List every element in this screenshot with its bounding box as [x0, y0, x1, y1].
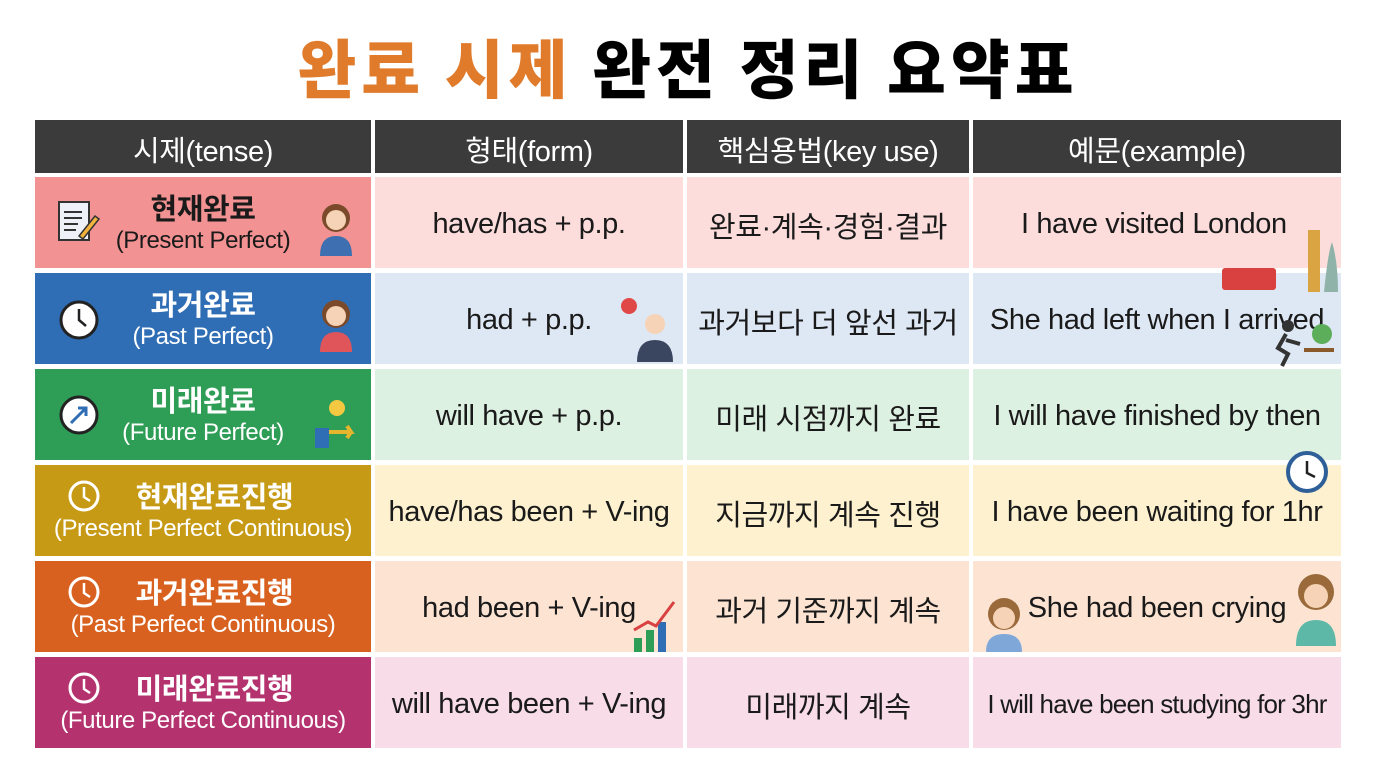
icon: crying woman — [1296, 574, 1336, 646]
icon: person row2 — [320, 300, 352, 352]
row2 form: had + p.p. — [466, 304, 592, 336]
row1 tense: (Present Perfect) — [116, 227, 290, 254]
row3 tense: (Future Perfect) — [122, 419, 284, 446]
icon: document — [58, 201, 100, 241]
row1 example: I have visited London — [1021, 208, 1287, 240]
title: 완료 시제 완전 정리 요약표 — [297, 20, 1079, 112]
row5 tense — [35, 561, 371, 652]
icon: clocks — [60, 300, 98, 340]
row5 example: She had been crying — [1028, 592, 1286, 624]
row2 use — [687, 273, 969, 364]
row5 tense: (Past Perfect Continuous) — [71, 611, 335, 638]
row4 form — [375, 465, 683, 556]
row4 tense: (Present Perfect Continuous) — [54, 515, 352, 542]
row3 use — [687, 369, 969, 460]
row1 use: 완료·계속·경험·결과 — [709, 212, 947, 244]
row1 form — [375, 177, 683, 268]
row4 example: I have been waiting for 1hr — [992, 496, 1322, 528]
row3 form: will have + p.p. — [436, 400, 622, 432]
header: example: 예문(example) — [1068, 136, 1246, 168]
row6 tense: (Future Perfect Continuous) — [60, 707, 346, 734]
row2 example: She had left when I arrived — [990, 304, 1324, 336]
row2 example — [973, 273, 1341, 364]
row5 form — [375, 561, 683, 652]
header: key use: 핵심용법(key use) — [718, 136, 938, 168]
icon: pointer hand — [315, 400, 355, 448]
icon: clock row4 — [1286, 451, 1328, 493]
row1 tense: 현재완료 — [150, 194, 256, 226]
row1 form: have/has + p.p. — [432, 208, 626, 240]
row6 form: will have been + V-ing — [392, 688, 666, 720]
row2 tense: (Past Perfect) — [132, 323, 274, 350]
icon: runner — [1275, 320, 1334, 367]
row3 example: I will have finished by then — [993, 400, 1321, 432]
row4 tense: 현재완료진행 — [136, 482, 293, 514]
row6 example — [973, 657, 1341, 748]
icon: London — [1222, 230, 1338, 292]
icon: crying girl — [986, 598, 1022, 652]
row5 use: 과거 기준까지 계속 — [715, 596, 941, 628]
row6 example: I will have been studying for 3hr — [987, 689, 1327, 719]
row2 use: 과거보다 더 앞선 과거 — [698, 308, 958, 340]
row6 form — [375, 657, 683, 748]
row3 tense — [35, 369, 371, 460]
header: key use — [687, 120, 969, 173]
row6 use: 미래까지 계속 — [745, 692, 911, 724]
header: tense: 시제(tense) — [133, 136, 273, 168]
row3 example — [973, 369, 1341, 460]
header: example — [973, 120, 1341, 173]
row5 use — [687, 561, 969, 652]
row3 form — [375, 369, 683, 460]
header: form — [375, 120, 683, 173]
row4 use — [687, 465, 969, 556]
row4 example — [973, 465, 1341, 556]
row2 tense — [35, 273, 371, 364]
row4 form: have/has been + V-ing — [388, 496, 670, 528]
row2 form — [375, 273, 683, 364]
row2 tense: 과거완료 — [150, 290, 256, 322]
row4 use: 지금까지 계속 진행 — [715, 500, 941, 532]
row5 tense: 과거완료진행 — [136, 578, 293, 610]
header: tense — [35, 120, 371, 173]
row6 tense: 미래완료진행 — [136, 674, 293, 706]
icon: man with pin — [621, 298, 673, 362]
row6 use — [687, 657, 969, 748]
row1 tense — [35, 177, 371, 268]
row5 example — [973, 561, 1341, 652]
icon: person row1 — [320, 204, 352, 256]
icon: chart — [633, 601, 676, 652]
row3 use: 미래 시점까지 완료 — [715, 404, 941, 436]
row5 form: had been + V-ing — [422, 592, 636, 624]
row1 example — [973, 177, 1341, 268]
header: form: 형태(form) — [465, 136, 593, 168]
row6 tense — [35, 657, 371, 748]
row4 tense — [35, 465, 371, 556]
row3 tense: 미래완료 — [150, 386, 256, 418]
row1 use — [687, 177, 969, 268]
